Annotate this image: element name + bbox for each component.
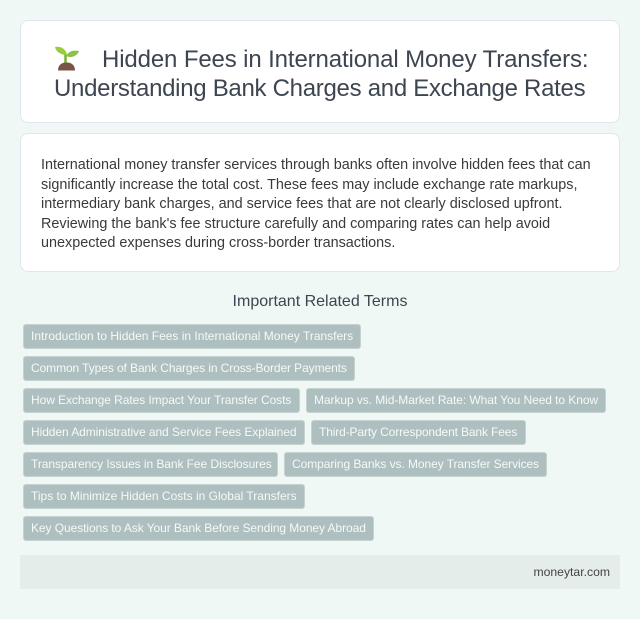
tag: Hidden Administrative and Service Fees Explained bbox=[31, 425, 296, 439]
description text bbox=[41, 157, 591, 251]
description text: International money transfer services through banks often involve hidden fees that can bbox=[41, 157, 591, 173]
tag bbox=[23, 484, 305, 509]
tag list bbox=[23, 324, 606, 541]
tag: Common Types of Bank Charges in Cross-Border Payments bbox=[31, 361, 347, 375]
tag: Markup vs. Mid-Market Rate: What You Need to Know bbox=[314, 393, 598, 407]
tag bbox=[306, 388, 606, 413]
tag bbox=[23, 388, 300, 413]
tag bbox=[311, 420, 526, 445]
tag: How Exchange Rates Impact Your Transfer Costs bbox=[31, 393, 291, 407]
description text: intermediary bank charges, and service fees that are not clearly disclosed upfront. bbox=[41, 196, 563, 212]
icon: sprout bbox=[55, 46, 79, 70]
tag bbox=[23, 324, 361, 349]
title line 2: Understanding Bank Charges and Exchange Rates bbox=[54, 75, 585, 102]
description text: Reviewing the bank's fee structure carefully and comparing rates can help avoid bbox=[41, 216, 550, 232]
footer bar bbox=[20, 555, 620, 589]
title line 1: Hidden Fees in International Money Transfers: bbox=[102, 46, 588, 73]
footer text: moneytar.com bbox=[533, 565, 610, 579]
section heading: Important Related Terms bbox=[233, 293, 407, 310]
tag bbox=[23, 452, 278, 477]
tag: Comparing Banks vs. Money Transfer Services bbox=[292, 457, 539, 471]
tag bbox=[23, 420, 305, 445]
tag: Transparency Issues in Bank Fee Disclosures bbox=[31, 457, 272, 471]
tag bbox=[284, 452, 547, 477]
panel: title card bbox=[20, 20, 620, 123]
panel: description card bbox=[20, 133, 620, 272]
description text: significantly increase the total cost. These fees may include exchange rate markups, bbox=[41, 176, 577, 192]
tag bbox=[23, 356, 355, 381]
tag: Introduction to Hidden Fees in International Money Transfers bbox=[31, 329, 353, 343]
tag bbox=[23, 516, 374, 541]
tag: Tips to Minimize Hidden Costs in Global Transfers bbox=[31, 489, 297, 503]
tag: Key Questions to Ask Your Bank Before Sending Money Abroad bbox=[31, 521, 366, 535]
description text: unexpected expenses during cross-border transactions. bbox=[41, 235, 395, 251]
tag: Third-Party Correspondent Bank Fees bbox=[319, 425, 517, 439]
